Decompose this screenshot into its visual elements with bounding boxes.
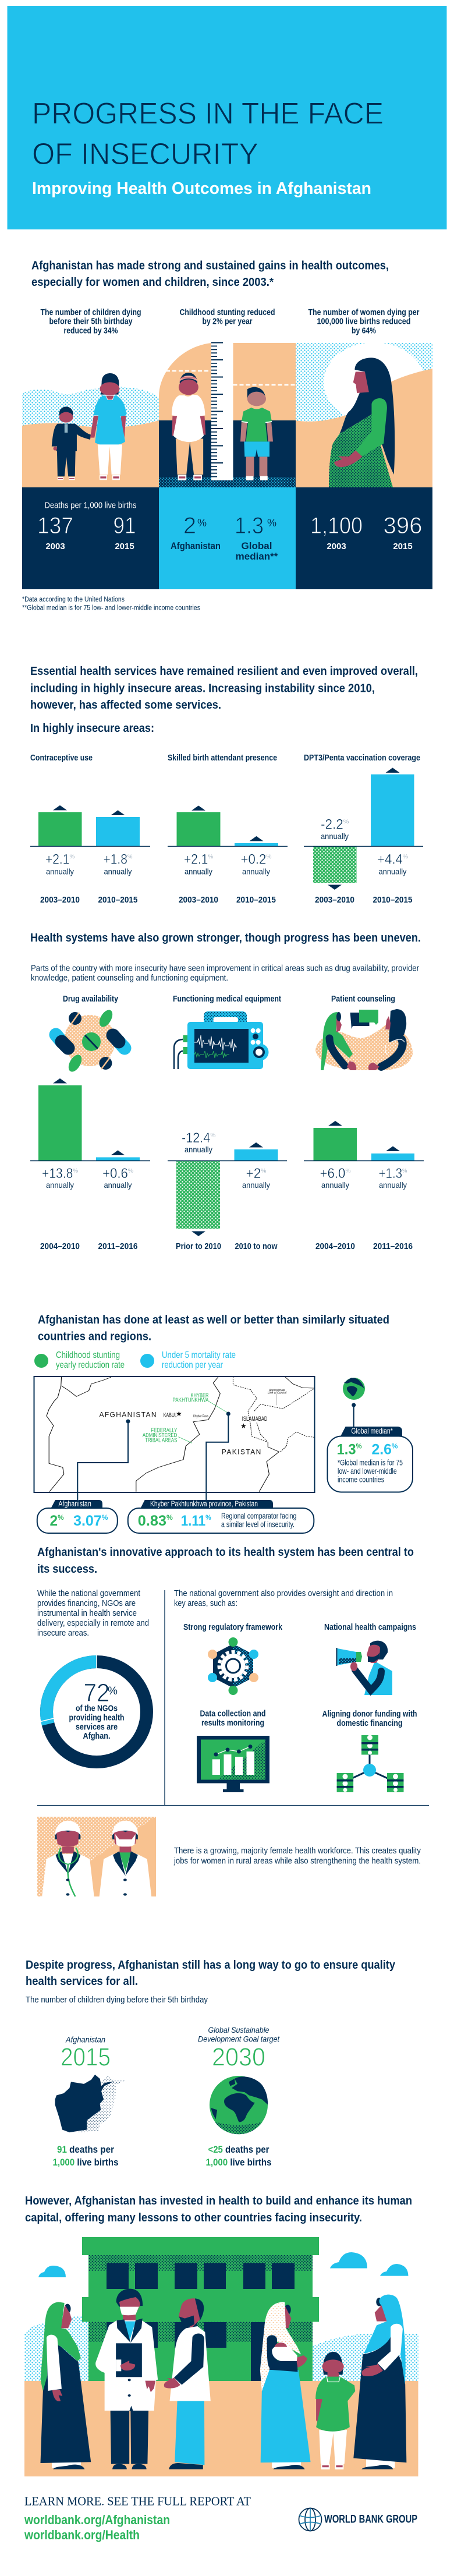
bar chart: skilled birth attendant presence: annually — [185, 866, 212, 876]
map: Khyber Pass — [193, 1415, 208, 1418]
footnotes — [22, 596, 200, 611]
icon: monitor with charts: Data collection and — [200, 1708, 265, 1719]
bar chart: functioning equipment: annually — [242, 1180, 270, 1190]
bar chart: functioning equipment: 2010 to now — [235, 1241, 278, 1251]
column captions: The number of women dying per — [308, 308, 420, 317]
icon: patient counseling: Patient counseling — [331, 994, 395, 1004]
callout: global median: low- and lower-middle — [338, 1467, 397, 1475]
panel: stunting stats: median** — [236, 551, 278, 562]
legend: Childhood stunting — [56, 1350, 120, 1360]
bar chart: skilled birth attendant presence — [168, 753, 288, 905]
callout: Afghanistan: 3.07 — [73, 1513, 102, 1529]
bar chart: vaccination coverage: DPT3/Penta vaccination coverage — [304, 753, 420, 763]
paragraph: health systems — [31, 964, 419, 983]
callout: Khyber Pakhtunkhwa: 1.11 — [181, 1513, 208, 1529]
centre scene background — [159, 342, 296, 487]
clinic building — [82, 2237, 319, 2381]
panel: under-five deaths stats: 2015 — [115, 542, 134, 551]
bar chart: contraceptive use: 2003–2010 — [40, 895, 80, 905]
subheading: The number of children dying before their 5th birthday — [26, 1995, 208, 2005]
bar chart: contraceptive use: +2.1 — [45, 851, 73, 868]
panel: stunting stats: Global — [242, 540, 272, 551]
panel: under-five deaths stats — [22, 487, 159, 589]
panel: maternal mortality stats: 1,100 — [310, 513, 363, 539]
bar chart: drug availability: +0.6 — [102, 1166, 130, 1181]
heading: comparison: Afghanistan has done at least as well or better than similarly situated — [38, 1314, 389, 1326]
heading: essential services: however, has affected some services. — [30, 699, 221, 712]
panel: Afghanistan 2015 — [52, 2034, 125, 2168]
callout: global median: 2.6 — [371, 1442, 392, 1458]
icon: small globe — [343, 1378, 365, 1400]
bar chart: vaccination coverage: annually — [378, 866, 406, 876]
callout: global median — [327, 1427, 413, 1492]
bar chart: functioning equipment: annually — [185, 1145, 212, 1154]
icon: drugs: Drug availability — [63, 994, 119, 1004]
icon: patient counseling — [315, 994, 413, 1070]
bar chart: skilled birth attendant presence: +0.2 — [241, 851, 268, 868]
bar chart: skilled birth attendant presence: % — [266, 854, 272, 861]
callout: Khyber Pakhtunkhwa: 0.83 — [138, 1513, 166, 1529]
map: KABUL — [164, 1413, 177, 1419]
footnotes: **Global median is for 75 low- and lower-middle income countries — [22, 604, 200, 611]
donut chart: 72%: 72 — [84, 1679, 109, 1707]
bar chart: contraceptive use: annually — [46, 866, 74, 876]
heading: innovative approach: its success. — [37, 1563, 97, 1576]
panel: SDG target 2030: Global Sustainable — [208, 2025, 269, 2034]
heading: human capital: capital, offering many lessons to other countries facing insecurity. — [25, 2211, 362, 2224]
panel: stunting stats: % — [197, 517, 207, 529]
figure: boy in green — [240, 387, 273, 480]
map: PAKHTUNKHWA — [172, 1397, 208, 1404]
column captions: by 64% — [352, 326, 376, 335]
divider lines — [37, 1590, 429, 1805]
footnotes: *Data according to the United Nations — [22, 596, 125, 603]
bar chart: contraceptive use: % — [69, 854, 75, 861]
map: Approximate — [268, 1389, 285, 1392]
bar chart: contraceptive use — [30, 753, 150, 905]
figure: small boy — [52, 406, 91, 480]
text: NGOs paragraph: insecure areas. — [37, 1628, 89, 1638]
bar chart: vaccination coverage: % — [343, 819, 349, 826]
logo: World Bank Group: WORLD BANK GROUP — [324, 2513, 417, 2526]
map: Line of Control — [268, 1392, 287, 1395]
callout: global median: income countries — [338, 1475, 384, 1484]
bar chart: patient counseling: annually — [321, 1180, 349, 1190]
figure: tall girl — [172, 373, 205, 480]
bar chart: skilled birth attendant presence: 2010–2015 — [236, 895, 276, 905]
bar chart: contraceptive use: Contraceptive use — [30, 753, 93, 763]
heading: comparison: countries and regions. — [38, 1330, 151, 1343]
text: NGOs paragraph — [37, 1588, 149, 1638]
icon: donor funding network: domestic financing — [336, 1718, 403, 1728]
heading: essential services — [30, 665, 418, 735]
bar chart: skilled birth attendant presence: Skilled birth attendant presence — [168, 753, 277, 763]
panel: maternal mortality stats — [296, 487, 432, 589]
text: NGOs paragraph: While the national government — [37, 1588, 141, 1598]
intro heading — [31, 260, 389, 289]
intro heading: especially for women and children, since 2003.* — [31, 276, 274, 289]
bar chart: functioning equipment: Prior to 2010 — [176, 1241, 221, 1251]
title: PROGRESS IN THE FACE — [32, 97, 384, 130]
map: KHYBER — [191, 1392, 209, 1399]
text: oversight paragraph: The national government also provides oversight and direction in — [174, 1588, 393, 1598]
panel: stunting stats: % — [267, 517, 276, 529]
bar chart: vaccination coverage: -2.2 — [321, 816, 345, 833]
icon: monitor with charts — [197, 1708, 269, 1792]
bar chart: functioning equipment: % — [261, 1167, 267, 1174]
bar chart: drug availability: % — [128, 1167, 133, 1174]
callout: Khyber Pakhtunkhwa: a similar level of insecurity. — [221, 1520, 295, 1529]
figure: woman with baby — [260, 2302, 311, 2469]
donut chart: 72%: % — [108, 1685, 118, 1697]
connector lines — [77, 1403, 355, 1500]
donut chart: 72%: providing health — [69, 1713, 125, 1722]
heading: long way to go — [26, 1959, 396, 1988]
text: health workforce — [173, 1846, 421, 1866]
callout: global median: *Global median is for 75 — [338, 1459, 403, 1467]
intro heading: Afghanistan has made strong and sustained gains in health outcomes, — [31, 260, 389, 273]
text: oversight paragraph — [174, 1588, 393, 1608]
bar chart: functioning equipment: % — [210, 1132, 215, 1139]
panel: Afghanistan 2015: 2015 — [61, 2043, 111, 2072]
legend — [34, 1350, 236, 1370]
panel: stunting stats: 1.3 — [235, 513, 264, 539]
bar chart: drug availability: % — [73, 1167, 78, 1174]
heading: essential services: including in highly insecure areas. Increasing instability since 2010, — [30, 682, 375, 695]
callout: global median: % — [392, 1442, 398, 1450]
hero illustration: children and woman — [22, 342, 432, 487]
column captions: reduced by 34% — [64, 326, 118, 335]
icon: health campaigns: National health campaigns — [324, 1622, 416, 1632]
panel: under-five deaths stats: Deaths per 1,000 live births — [44, 501, 136, 510]
legend: Under 5 mortality rate — [162, 1350, 236, 1360]
subtitle: Improving Health Outcomes in Afghanistan — [32, 179, 371, 198]
logo: World Bank Group — [299, 2508, 417, 2531]
callout: Afghanistan: % — [102, 1513, 108, 1521]
panel: maternal mortality stats: 2003 — [327, 542, 346, 551]
footer: learn more — [24, 2494, 251, 2542]
header panel — [7, 6, 447, 229]
bar chart: drug availability: annually — [104, 1180, 132, 1190]
bar chart: patient counseling: 2011–2016 — [373, 1241, 413, 1251]
column captions: The number of children dying — [41, 308, 141, 317]
column captions: 100,000 live births reduced — [317, 317, 411, 326]
bar chart: drug availability: annually — [46, 1180, 74, 1190]
bar chart: vaccination coverage: +4.4 — [377, 851, 405, 868]
bar chart: drug availability: +13.8 — [42, 1166, 77, 1181]
panel: maternal mortality stats: 396 — [383, 513, 423, 539]
ground — [24, 2381, 418, 2476]
map: ★ — [240, 1422, 247, 1430]
icon: regulatory framework — [183, 1622, 283, 1695]
bar chart: patient counseling — [304, 1121, 424, 1251]
panel: SDG target 2030: 2030 — [212, 2043, 265, 2072]
icon: drugs — [56, 994, 125, 1074]
title: OF INSECURITY — [32, 137, 258, 171]
illustration: female health workers — [37, 1817, 156, 1896]
text: health workforce: jobs for women in rural areas while also strengthening the health system. — [173, 1856, 421, 1866]
heading: human capital: However, Afghanistan has invested in health to build and enhance its human — [25, 2195, 412, 2207]
icon: regulatory framework: Strong regulatory framework — [183, 1622, 283, 1632]
panel: SDG target 2030: <25 deaths per — [208, 2144, 269, 2155]
column captions: by 2% per year — [203, 317, 253, 326]
panel: under-five deaths stats: 2003 — [45, 542, 65, 551]
left scene background — [22, 387, 159, 487]
map: ADMINISTERED — [143, 1432, 178, 1439]
bar chart: contraceptive use: +1.8 — [104, 851, 131, 868]
bar chart: drug availability — [30, 1078, 150, 1251]
panel: under-five deaths stats: 91 — [113, 513, 136, 539]
bar chart: functioning equipment: -12.4 — [182, 1130, 214, 1146]
bar chart: vaccination coverage: 2003–2010 — [315, 895, 354, 905]
panel: SDG target 2030 — [198, 2025, 280, 2168]
bar chart: skilled birth attendant presence: 2003–2010 — [179, 895, 218, 905]
icon: donor funding network — [322, 1709, 417, 1792]
heading: essential services: Essential health services have remained resilient and even improved overall, — [30, 665, 418, 678]
bar chart: contraceptive use: annually — [104, 866, 132, 876]
panel: Afghanistan 2015: Afghanistan — [65, 2034, 105, 2044]
icon: medical monitor: Functioning medical equipment — [173, 994, 281, 1004]
footer: learn more: worldbank.org/Health — [24, 2528, 140, 2542]
bar chart: skilled birth attendant presence: annually — [242, 866, 270, 876]
heading: essential services: In highly insecure areas: — [30, 722, 154, 735]
bar chart: patient counseling: +6.0 — [320, 1166, 347, 1181]
bar chart: patient counseling: % — [345, 1167, 351, 1174]
text: NGOs paragraph: instrumental in health service — [37, 1608, 137, 1618]
text: health workforce: There is a growing, majority female health workforce. This creates quality — [174, 1846, 421, 1856]
heading: health systems: Health systems have also grown stronger, though progress has been uneven. — [30, 932, 421, 944]
bar chart: contraceptive use: % — [127, 854, 133, 861]
heading: human capital — [25, 2195, 412, 2224]
figure: woman in blue scarf — [353, 2295, 406, 2469]
panel: SDG target 2030: 1,000 live births — [206, 2157, 271, 2168]
callout: global median: Global median* — [351, 1427, 393, 1435]
bar chart: patient counseling: 2004–2010 — [315, 1241, 355, 1251]
column captions: Childhood stunting reduced — [179, 308, 275, 317]
map — [34, 1377, 314, 1492]
figure: nurse with mask — [100, 1821, 151, 1896]
bar chart: vaccination coverage: annually — [321, 831, 349, 841]
text: oversight paragraph: key areas, such as: — [174, 1598, 237, 1608]
text: NGOs paragraph: provides financing, NGOs are — [37, 1598, 136, 1608]
figure: woman in green scarf — [40, 2302, 91, 2469]
bar chart: skilled birth attendant presence: +2.1 — [184, 851, 211, 868]
map: FEDERALLY — [151, 1427, 177, 1434]
callout: Afghanistan: % — [58, 1513, 64, 1521]
callout: global median: % — [356, 1442, 362, 1450]
right scene background — [296, 342, 432, 487]
icon: monitor with charts: results monitoring — [201, 1718, 264, 1728]
heading: long way to go: Despite progress, Afghanistan still has a long way to go to ensure quality — [26, 1959, 396, 1972]
bar chart: patient counseling: % — [402, 1167, 407, 1174]
illustration: people in front of clinic — [24, 2237, 418, 2476]
footer: learn more: worldbank.org/Afghanistan — [24, 2513, 170, 2527]
bar chart: drug availability: 2004–2010 — [40, 1241, 80, 1251]
bar chart: functioning equipment — [168, 1130, 287, 1251]
heading: comparison — [38, 1314, 389, 1343]
figure: young girl — [315, 2352, 355, 2469]
panel: stunting stats — [159, 487, 296, 589]
bar chart: functioning equipment: +2 — [246, 1166, 262, 1181]
icon: medical monitor — [173, 994, 281, 1069]
callout: Khyber Pakhtunkhwa — [128, 1499, 314, 1533]
panel: SDG target 2030: Development Goal target — [198, 2034, 280, 2044]
donut chart: 72%: services are — [76, 1722, 118, 1732]
bar chart: vaccination coverage: 2010–2015 — [373, 895, 412, 905]
figure: pregnant woman — [334, 358, 395, 475]
heading: innovative approach: Afghanistan's innovative approach to its health system has been central to — [37, 1546, 414, 1559]
panel: stunting stats: 2 — [183, 513, 196, 539]
legend: reduction per year — [162, 1360, 224, 1370]
callout: Afghanistan: Afghanistan — [58, 1499, 91, 1508]
bar chart: drug availability: 2011–2016 — [98, 1241, 137, 1251]
figure: man in white vest — [164, 2298, 211, 2469]
map: AFGHANISTAN — [99, 1410, 156, 1418]
map: ISLAMABAD — [242, 1416, 267, 1423]
icon: donor funding network: Aligning donor funding with — [322, 1709, 417, 1719]
callout: Khyber Pakhtunkhwa: Regional comparator facing — [221, 1512, 296, 1520]
column captions — [41, 308, 420, 335]
clouds — [38, 2252, 409, 2277]
panel: under-five deaths stats: 137 — [37, 513, 73, 539]
woman's dress — [329, 415, 393, 487]
bar chart: vaccination coverage: % — [403, 854, 408, 861]
bar chart: patient counseling: +1.3 — [378, 1166, 406, 1181]
panel: Afghanistan 2015: 1,000 live births — [52, 2157, 119, 2168]
panel: Afghanistan 2015: 91 deaths per — [57, 2144, 114, 2155]
donut chart: 72% — [35, 1655, 147, 1762]
heading: innovative approach — [37, 1546, 414, 1576]
bar chart: vaccination coverage — [304, 753, 423, 905]
donut chart: 72%: Afghan. — [83, 1731, 111, 1741]
map: TRIBAL AREAS — [145, 1437, 177, 1444]
figure: doctor with clipboard — [95, 2289, 158, 2469]
footer: learn more: LEARN MORE. SEE THE FULL REPORT AT — [24, 2494, 251, 2508]
heading: long way to go: health services for all. — [26, 1975, 138, 1988]
callout: Khyber Pakhtunkhwa: % — [205, 1513, 211, 1521]
bar chart: skilled birth attendant presence: % — [208, 854, 213, 861]
callout: global median: 1.3 — [337, 1442, 357, 1458]
icon: health campaigns — [324, 1622, 416, 1695]
paragraph: health systems: knowledge, patient counseling and functioning equipment. — [31, 974, 228, 983]
panel: maternal mortality stats: 2015 — [393, 542, 413, 551]
column captions: before their 5th birthday — [49, 317, 133, 326]
callout: Afghanistan: 2 — [50, 1513, 58, 1529]
callout: Khyber Pakhtunkhwa: Khyber Pakhtunkhwa province, Pakistan — [150, 1499, 258, 1508]
bar chart: patient counseling: annually — [379, 1180, 407, 1190]
callout: Afghanistan — [37, 1499, 118, 1533]
map: ★ — [176, 1410, 182, 1418]
panel: stunting stats: Afghanistan — [171, 540, 221, 551]
map: PAKISTAN — [222, 1448, 261, 1456]
figure: nurse with stethoscope — [42, 1821, 94, 1896]
background dots — [24, 2315, 418, 2381]
donut chart: 72%: of the NGOs — [76, 1704, 118, 1713]
title — [32, 97, 384, 171]
figure: girl in blue dress — [90, 373, 126, 480]
legend: yearly reduction rate — [56, 1360, 125, 1370]
bar chart: contraceptive use: 2010–2015 — [98, 895, 137, 905]
text: NGOs paragraph: delivery, especially in remote and — [37, 1618, 149, 1628]
callout: Khyber Pakhtunkhwa: % — [166, 1513, 173, 1521]
paragraph: health systems: Parts of the country with more insecurity have seen improvement in critical areas such as drug availability, provider — [31, 964, 419, 974]
